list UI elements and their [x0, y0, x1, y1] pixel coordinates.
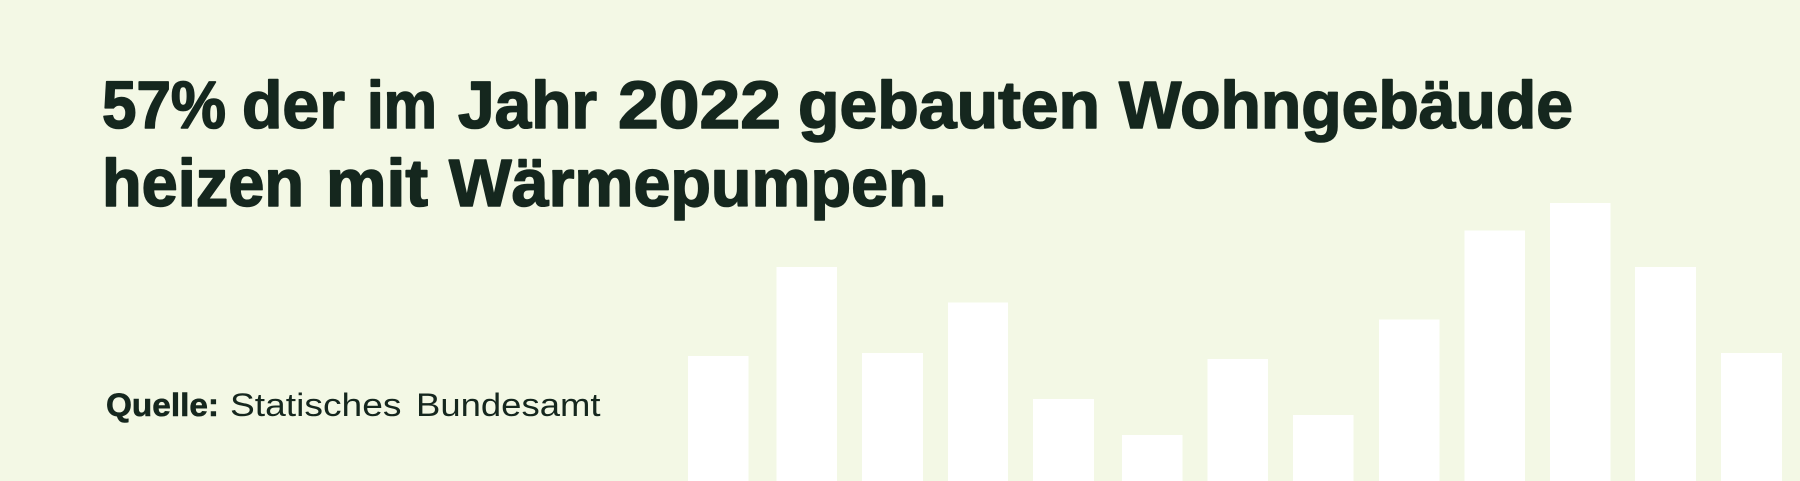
title: Wärmepumpen. — [449, 146, 947, 221]
title: heizen — [102, 146, 304, 221]
source note — [106, 387, 601, 423]
source note: Statisches — [230, 387, 402, 423]
title: Jahr — [458, 68, 597, 143]
source note: Quelle: — [106, 387, 219, 423]
title — [102, 68, 1573, 221]
title: der — [242, 68, 345, 143]
title: gebauten — [798, 68, 1100, 143]
title: 57% — [102, 68, 226, 143]
title: im — [367, 68, 437, 143]
title: Wohngebäude — [1119, 68, 1573, 143]
source note: Bundesamt — [416, 387, 601, 423]
title: mit — [326, 146, 428, 221]
decorative bar chart — [688, 203, 1782, 481]
title: 2022 — [618, 68, 781, 143]
